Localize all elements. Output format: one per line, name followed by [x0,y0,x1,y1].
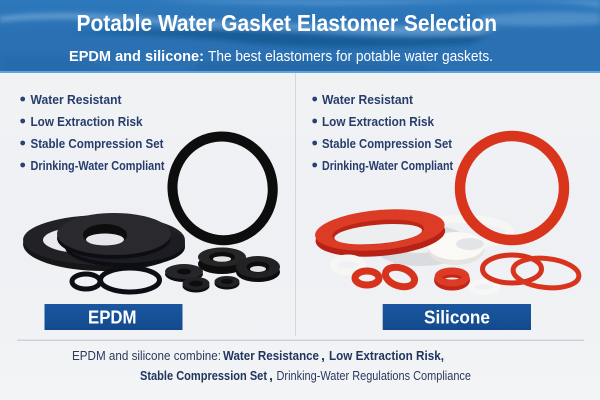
red flat gasket [313,204,447,262]
summary text: , [269,368,273,383]
EPDM label [44,304,182,330]
subtitle [69,48,493,65]
Silicone feature list: Low Extraction Risk [322,114,435,129]
vertical panel divider [295,73,296,336]
black EPDM gaskets photo [23,125,284,293]
Silicone feature list: Drinking-Water Compliant [322,158,454,173]
EPDM feature list: Water Resistant [30,92,122,107]
EPDM feature list: Drinking-Water Compliant [30,158,165,173]
subtitle: The best elastomers for potable water gaskets. [208,48,493,65]
white and grey gaskets behind [372,219,510,266]
large black O-ring [161,125,284,252]
title: Potable Water Gasket Elastomer Selection [76,10,497,36]
Silicone feature list [312,92,454,173]
summary text: EPDM and silicone combine: [72,348,221,363]
summary text: Low Extraction Risk, [329,348,444,363]
small black rings and washers [72,248,280,292]
panel: EPDM [20,92,284,330]
header banner: water [0,0,600,73]
horizontal divider [17,340,584,341]
Silicone label: Silicone [424,308,490,328]
Silicone feature list: Stable Compression Set [322,136,453,151]
EPDM feature list: Low Extraction Risk [30,114,143,129]
EPDM label: EPDM [88,308,137,328]
subtitle: EPDM and silicone: [69,48,204,65]
summary text: Drinking-Water Regulations Compliance [276,368,471,383]
panel: Silicone [312,92,580,330]
summary text: Stable Compression Set [140,368,268,383]
EPDM feature list: Stable Compression Set [30,136,164,151]
Silicone feature list: Water Resistant [322,92,414,107]
summary text: Water Resistance [223,348,319,363]
large red O-ring [460,136,564,240]
EPDM feature list [20,92,165,173]
summary text [72,348,471,383]
stacked black flat gaskets [23,213,185,271]
summary text: , [321,348,325,363]
small red and white rings [334,255,580,292]
silicone gaskets photo [313,136,580,292]
Silicone label [383,304,531,330]
